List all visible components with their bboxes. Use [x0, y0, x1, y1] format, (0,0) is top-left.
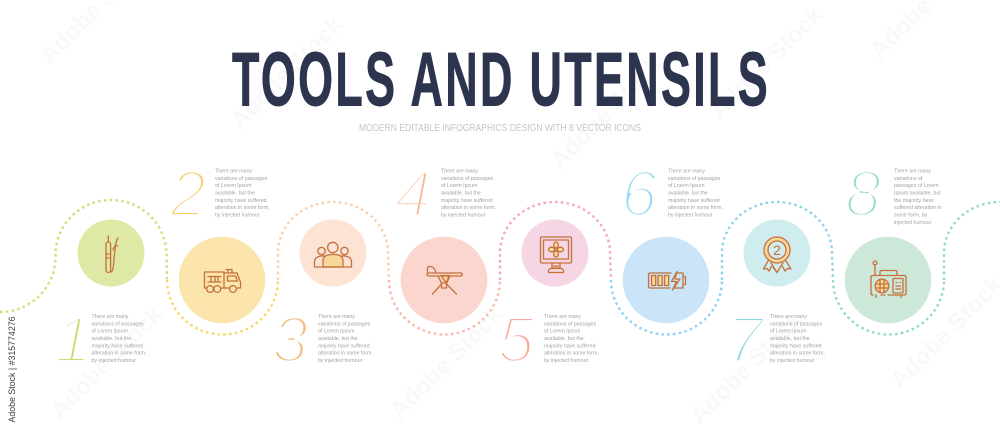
text block 7: of Lorem Ipsum	[770, 329, 807, 335]
background watermark: Adobe Stock	[225, 11, 348, 134]
text block 4: There are many	[441, 168, 478, 174]
text block 5: variations of passages	[544, 321, 597, 327]
text block 3: by injected humour	[318, 358, 363, 364]
icon: second-place rosette: 2	[773, 242, 781, 258]
text block 2: There are many	[215, 168, 252, 174]
circle 7	[744, 220, 810, 286]
text block 5: by injected humour	[544, 358, 589, 364]
number 3: 3	[272, 303, 308, 376]
text block 1: There are many	[92, 314, 129, 320]
text block 8: There are many	[894, 168, 931, 174]
text block 4: by injected humour	[441, 212, 486, 218]
text block 1: majority have suffered	[92, 343, 143, 349]
text block 5: There are many	[544, 314, 581, 320]
step 8	[845, 157, 942, 323]
step 7	[727, 220, 825, 376]
step 4	[395, 157, 496, 323]
number 5: 5	[498, 303, 535, 376]
number 8: 8	[845, 157, 881, 230]
text block 3: of Lorem Ipsum	[318, 329, 355, 335]
icon: radio	[871, 261, 906, 298]
text block 4: alteration in some form,	[441, 205, 496, 211]
circle 2	[179, 237, 265, 323]
text block 3: variations of passages	[318, 321, 371, 327]
background watermark: Adobe Stock	[385, 301, 508, 424]
icon: people	[314, 242, 352, 267]
text block 8: the majority have	[894, 198, 934, 204]
text block 8: passages of Lorem	[894, 183, 939, 189]
text block 4: available, but the	[441, 190, 481, 196]
icon: ironing board	[427, 266, 462, 294]
text block 1: available, but the	[92, 336, 131, 342]
dotted connector path	[0, 200, 1000, 334]
circle 8	[845, 237, 931, 323]
number 1: 1	[55, 303, 91, 376]
text block 8: variations of	[894, 176, 923, 182]
text block 7: There are many	[770, 314, 807, 320]
text block 8: suffered alteration in	[894, 205, 942, 211]
text block 2: available, but the	[215, 190, 255, 196]
text block 5: alteration in some form,	[544, 351, 599, 357]
text block 3: available, but the	[318, 336, 358, 342]
step 6	[621, 157, 723, 323]
text block 8: injected humour	[894, 220, 932, 226]
circle 3	[300, 220, 366, 286]
icon: monitor with fan	[540, 237, 572, 272]
text block 6: by injected humour	[668, 212, 713, 218]
text block 4: of Lorem Ipsum	[441, 183, 478, 189]
subtitle: MODERN EDITABLE INFOGRAPHICS DESIGN WITH 8 VECTOR ICONS	[359, 123, 641, 134]
text block 2: majority have suffered	[215, 198, 267, 204]
circle 4	[401, 237, 487, 323]
background watermark: Adobe Stock	[545, 51, 668, 174]
text block 1: variations of passages	[92, 321, 144, 327]
text block 6: available, but the	[668, 190, 708, 196]
icon: second-place rosette	[764, 237, 791, 272]
text block 7: variations of passages	[770, 321, 823, 327]
number 4: 4	[395, 157, 431, 230]
text block 4: variations of passages	[441, 176, 494, 182]
icon: fire truck	[204, 270, 240, 292]
background watermark: Adobe Stock	[685, 306, 808, 429]
step 5	[498, 220, 599, 376]
text block 8: Ipsum available, but	[894, 190, 941, 196]
number 6: 6	[621, 157, 658, 230]
text block 5: available, but the	[544, 336, 584, 342]
circle 1	[78, 220, 144, 286]
text block 2: variations of passages	[215, 176, 268, 182]
text block 8: some form, by	[894, 212, 928, 218]
icon: voltage tester	[106, 236, 118, 272]
text block 1: by injected humour	[92, 358, 136, 364]
text block 3: majority have suffered	[318, 343, 370, 349]
step 1	[55, 220, 146, 376]
background watermark: Adobe Stock	[45, 301, 168, 424]
text block 3: alteration in some form,	[318, 351, 373, 357]
text block 2: of Lorem Ipsum	[215, 183, 252, 189]
text block 7: alteration in some form,	[770, 351, 825, 357]
text block 6: majority have suffered	[668, 198, 720, 204]
circle 6	[623, 237, 709, 323]
text block 7: by injected humour	[770, 358, 815, 364]
text block 6: of Lorem Ipsum	[668, 183, 705, 189]
text block 1: alteration in some form,	[92, 351, 146, 357]
text block 4: majority have suffered	[441, 198, 493, 204]
number 7: 7	[727, 303, 766, 376]
text block 2: by injected humour	[215, 212, 260, 218]
text block 5: majority have suffered	[544, 343, 596, 349]
text block 6: There are many	[668, 168, 705, 174]
circle 5	[522, 220, 588, 286]
text block 3: There are many	[318, 314, 355, 320]
text block 1: of Lorem Ipsum	[92, 329, 129, 335]
step 2	[169, 157, 270, 323]
icon: charging battery	[648, 272, 686, 290]
step 3	[272, 220, 373, 376]
number 2: 2	[169, 157, 206, 230]
stock side label: Adobe Stock | #315774276	[7, 316, 17, 422]
text block 6: alteration in some form,	[668, 205, 723, 211]
background watermark: Adobe Stock	[705, 1, 828, 124]
text block 7: available, but the	[770, 336, 810, 342]
text block 5: of Lorem Ipsum	[544, 329, 581, 335]
text block 2: alteration in some form,	[215, 205, 270, 211]
text block 6: variations of passages	[668, 176, 721, 182]
text block 7: majority have suffered	[770, 343, 822, 349]
